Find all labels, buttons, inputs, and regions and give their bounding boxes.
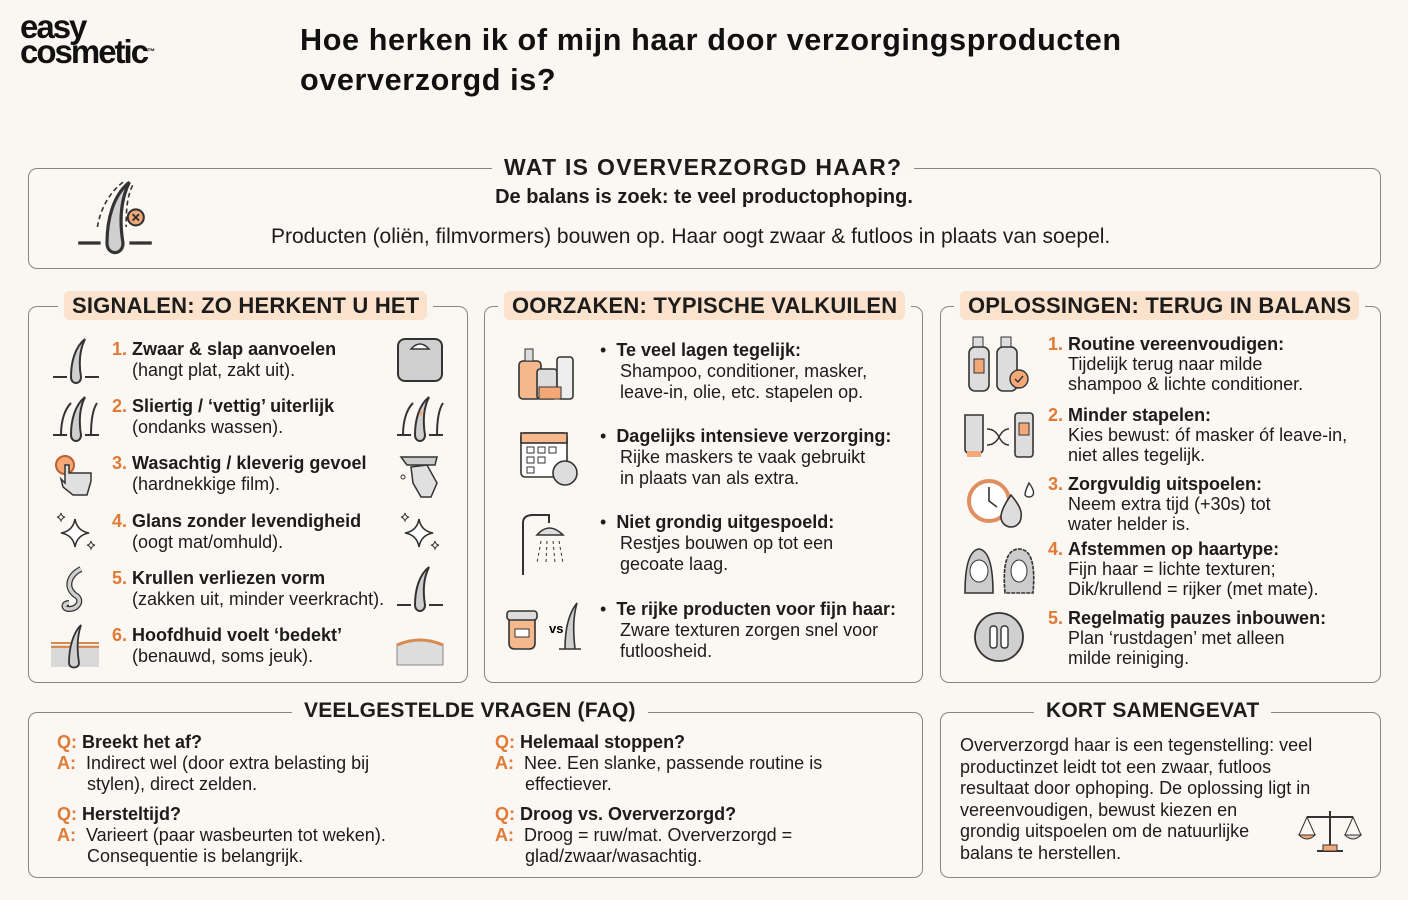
signal 4 [112,511,361,552]
summary text: Oververzorgd haar is een tegenstelling: veel [960,735,1312,755]
heading: signalen: SIGNALEN: ZO HERKENT U HET [72,293,419,318]
faq 3: effectiever. [525,774,612,794]
solution 1 [1048,334,1303,394]
icon: hair with x [78,181,152,254]
summary text: resultaat door ophoping. De oplossing ligt in [960,778,1310,798]
panel: wat is oververzorgd haar [28,168,1381,269]
icons oorzaken: vs [549,621,563,636]
faq 4: glad/zwaar/wasachtig. [525,846,702,866]
icon: scales [1298,811,1362,852]
signal 3 [112,453,366,494]
solution 3 [1048,474,1271,534]
logo: cosmetic™ [20,33,155,70]
icons oorzaken [506,348,581,650]
title [300,23,1122,97]
signal 1: 1. Zwaar & slap aanvoelen [112,339,336,359]
faq 2 [57,804,386,866]
faq 3: A: Nee. Een slanke, passende routine is [495,753,822,773]
signal 5 [112,568,384,609]
faq 4: Q: Droog vs. Oververzorgd? [495,804,736,824]
signal 1 [112,339,336,380]
signal 5: (zakken uit, minder veerkracht). [132,589,384,609]
subheading: De balans is zoek: te veel productophoping. [495,186,913,208]
summary text: vereenvoudigen, bewust kiezen en [960,800,1237,820]
solution 1: 1. Routine vereenvoudigen: [1048,334,1284,354]
solution 5 [1048,608,1326,668]
solution 2: Kies bewust: óf masker óf leave-in, [1068,425,1347,445]
cause 3: Restjes bouwen op tot een [620,533,833,553]
summary text [960,735,1312,862]
solution 4: 4. Afstemmen op haartype: [1048,539,1279,559]
faq 1: Q: Breekt het af? [57,732,202,752]
solution 1: Tijdelijk terug naar milde [1068,354,1262,374]
cause 2 [600,426,891,488]
cause 1: leave-in, olie, etc. stapelen op. [620,382,863,402]
faq 1: stylen), direct zelden. [87,774,257,794]
solution 3: 3. Zorgvuldig uitspoelen: [1048,474,1262,494]
icon set signalen [51,338,444,668]
signal 5: 5. Krullen verliezen vorm [112,568,325,588]
signal 2: (ondanks wassen). [132,417,283,437]
faq 2: A: Varieert (paar wasbeurten tot weken). [57,825,386,845]
cause 4 [600,599,896,661]
faq 2: Consequentie is belangrijk. [87,846,303,866]
heading: kort samengevat: KORT SAMENGEVAT [1046,699,1259,722]
cause 2: in plaats van als extra. [620,468,799,488]
cause 1: Shampoo, conditioner, masker, [620,361,867,381]
solution 4: Dik/krullend = rijker (met mate). [1068,579,1319,599]
solution 5: Plan ‘rustdagen’ met alleen [1068,628,1284,648]
faq 1 [57,732,369,794]
cause 2: Rijke maskers te vaak gebruikt [620,447,865,467]
panel: kort samengevat [940,712,1381,878]
solution 3: water helder is. [1068,514,1190,534]
logo: easy [20,8,85,45]
title: Hoe herken ik of mijn haar door verzorgingsproducten [300,23,1122,57]
faq 2: Q: Hersteltijd? [57,804,181,824]
solution 3: Neem extra tijd (+30s) tot [1068,494,1271,514]
signal 1: (hangt plat, zakt uit). [132,360,295,380]
cause 3 [600,512,834,574]
summary text: grondig uitspoelen om de natuurlijke [960,821,1249,841]
signal 3: 3. Wasachtig / kleverig gevoel [112,453,366,473]
solution 5: 5. Regelmatig pauzes inbouwen: [1048,608,1326,628]
cause 1 [600,340,867,402]
cause 3: • Niet grondig uitgespoeld: [600,512,834,532]
solution 4 [1048,539,1319,599]
signal 3: (hardnekkige film). [132,474,280,494]
cause 1: • Te veel lagen tegelijk: [600,340,801,360]
solution 5: milde reiniging. [1068,648,1189,668]
summary text: balans te herstellen. [960,842,1121,862]
heading: wat is: WAT IS OVERVERZORGD HAAR? [504,154,902,180]
faq 3: Q: Helemaal stoppen? [495,732,685,752]
title: oververzorgd is? [300,63,556,97]
signal 2 [112,396,334,437]
signal 6: (benauwd, soms jeuk). [132,646,313,666]
panel: signalen [28,306,468,683]
cause 4: futloosheid. [620,641,712,661]
solution 2: 2. Minder stapelen: [1048,405,1211,425]
panel: oplossingen [940,306,1381,683]
cause 4: • Te rijke producten voor fijn haar: [600,599,896,619]
faq 1: A: Indirect wel (door extra belasting bij [57,753,369,773]
solution 1: shampoo & lichte conditioner. [1068,374,1303,394]
heading: oorzaken: OORZAKEN: TYPISCHE VALKUILEN [512,293,897,318]
signal 4: 4. Glans zonder levendigheid [112,511,361,531]
signal 6: 6. Hoofdhuid voelt ‘bedekt’ [112,625,342,645]
logo [20,8,155,70]
solution 2 [1048,405,1347,465]
solution 4: Fijn haar = lichte texturen; [1068,559,1276,579]
panel: faq [28,712,923,878]
signal 6 [112,625,342,666]
summary text: productinzet leidt tot een zwaar, futloos [960,756,1271,776]
faq 4: A: Droog = ruw/mat. Oververzorgd = [495,825,792,845]
panel: oorzaken [484,306,923,683]
body text: Producten (oliën, filmvormers) bouwen op. Haar oogt zwaar & futloos in plaats van soepel. [271,225,1110,248]
cause 2: • Dagelijks intensieve verzorging: [600,426,891,446]
icons oplossingen [964,336,1035,662]
solution 2: niet alles tegelijk. [1068,445,1205,465]
cause 4: Zware texturen zorgen snel voor [620,620,878,640]
faq 4 [495,804,792,866]
heading: faq: VEELGESTELDE VRAGEN (FAQ) [304,699,636,722]
faq 3 [495,732,822,794]
heading: oplossingen: OPLOSSINGEN: TERUG IN BALANS [968,293,1351,318]
signal 4: (oogt mat/omhuld). [132,532,283,552]
signal 2: 2. Sliertig / ‘vettig’ uiterlijk [112,396,334,416]
cause 3: gecoate laag. [620,554,728,574]
